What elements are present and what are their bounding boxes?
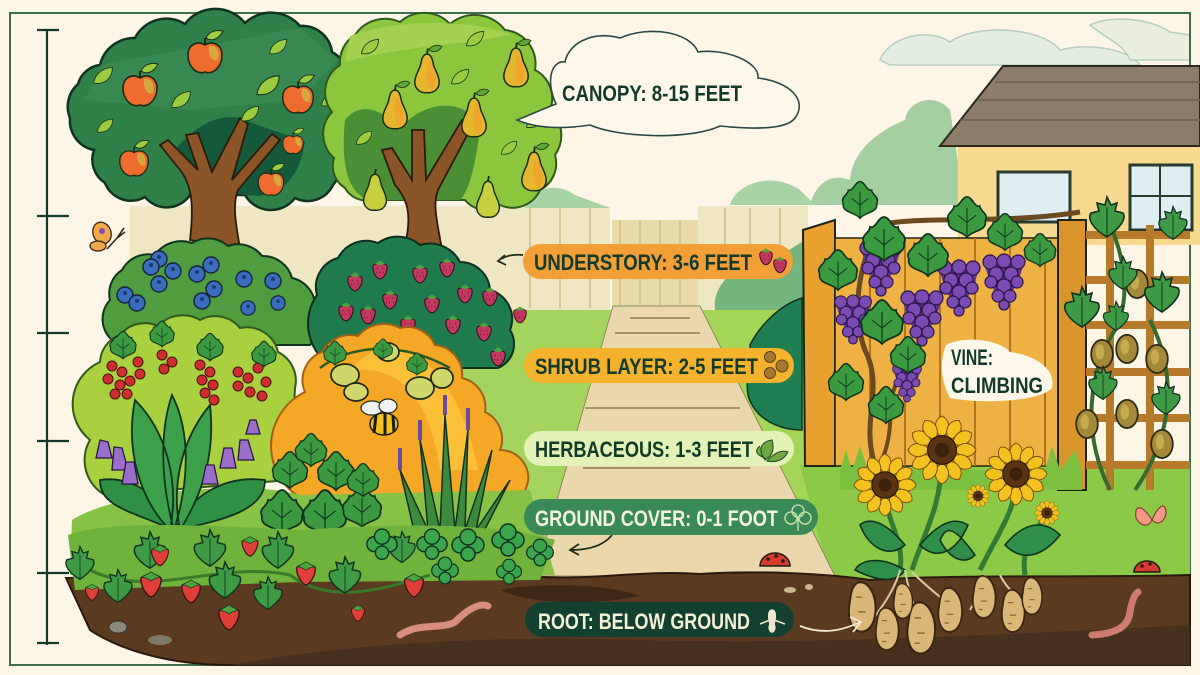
canopy	[323, 13, 561, 210]
arrow: root	[800, 617, 861, 632]
kiwi leaves	[1065, 197, 1187, 414]
label: root	[525, 602, 794, 637]
kiwi fruits	[1076, 270, 1173, 458]
ladybug: right	[1134, 561, 1160, 572]
comfrey plant	[96, 395, 265, 530]
label: shrub layer: SHRUB LAYER: 2-5 FEET	[535, 354, 758, 379]
mint plant	[261, 434, 381, 536]
arrow: understory	[498, 255, 523, 265]
pear tree	[323, 13, 561, 250]
back fence	[130, 206, 808, 310]
strawberries	[86, 537, 423, 630]
currant leaves	[110, 321, 276, 367]
label: herbaceous: HERBACEOUS: 1-3 FEET	[535, 437, 753, 462]
label: root: ROOT: BELOW GROUND	[538, 609, 750, 634]
label: shrub layer	[524, 348, 794, 383]
earthworm: left	[400, 605, 488, 635]
arrow: ground cover	[570, 535, 612, 555]
grape clusters	[835, 240, 1025, 402]
ground cover: strawberries and clover	[66, 524, 555, 630]
wooden fence	[803, 220, 1086, 490]
height scale	[37, 30, 69, 645]
stems and leaves	[885, 460, 1045, 575]
raspberry bush	[308, 237, 526, 368]
garden path	[535, 306, 835, 576]
path cracks	[583, 318, 750, 468]
pear leaves	[356, 31, 545, 154]
label: vine	[942, 340, 1053, 401]
trunk	[382, 120, 472, 250]
callout: canopy: CANOPY: 8-15 FEET	[562, 81, 742, 106]
trellis with kiwi vine	[1065, 197, 1190, 490]
gooseberry vine	[320, 349, 450, 368]
strawberry leaves	[66, 530, 415, 609]
label: understory	[523, 244, 793, 279]
label: ground cover: GROUND COVER: 0-1 FOOT	[535, 506, 778, 531]
label: herbaceous	[524, 431, 794, 466]
blueberries	[117, 251, 285, 315]
gooseberry bush	[271, 324, 528, 505]
butterfly: right	[1136, 506, 1166, 525]
lavender grass clump	[400, 395, 510, 535]
label: ground cover	[524, 499, 818, 535]
small shrub by fence	[747, 298, 802, 430]
pears	[364, 39, 549, 217]
tubers	[849, 576, 1042, 654]
apple tree	[68, 9, 350, 248]
currant clusters	[103, 350, 271, 405]
grape leaves	[819, 182, 1056, 423]
callout: canopy	[517, 31, 799, 136]
apples	[120, 31, 314, 195]
flower heads	[854, 416, 1060, 526]
herbaceous low background	[70, 488, 555, 575]
soil band	[66, 572, 1190, 665]
sunflowers	[854, 416, 1060, 579]
label: vine: VINE:	[951, 345, 993, 370]
background trees	[525, 100, 965, 310]
bee	[361, 399, 398, 435]
gooseberry leaves	[324, 339, 427, 375]
clover	[367, 524, 553, 584]
ladybug: path	[760, 553, 790, 566]
trunk	[160, 118, 280, 248]
canopy	[68, 9, 350, 210]
house	[940, 66, 1200, 245]
comfrey flowers	[96, 420, 260, 484]
grass tufts by fence	[840, 446, 1082, 490]
blueberry bush	[103, 238, 318, 345]
grass	[430, 310, 1190, 580]
raspberries	[339, 258, 526, 366]
canopy leaves	[94, 39, 339, 132]
label: understory: UNDERSTORY: 3-6 FEET	[534, 250, 752, 275]
currant bush	[73, 315, 296, 495]
label: vine: CLIMBING	[951, 373, 1043, 398]
sunchoke roots	[849, 570, 1042, 654]
butterfly: left	[90, 220, 125, 251]
earthworm: right	[1092, 592, 1138, 635]
sky and clouds	[880, 19, 1190, 65]
grape vine on fence	[819, 182, 1080, 465]
gooseberries	[331, 343, 453, 401]
